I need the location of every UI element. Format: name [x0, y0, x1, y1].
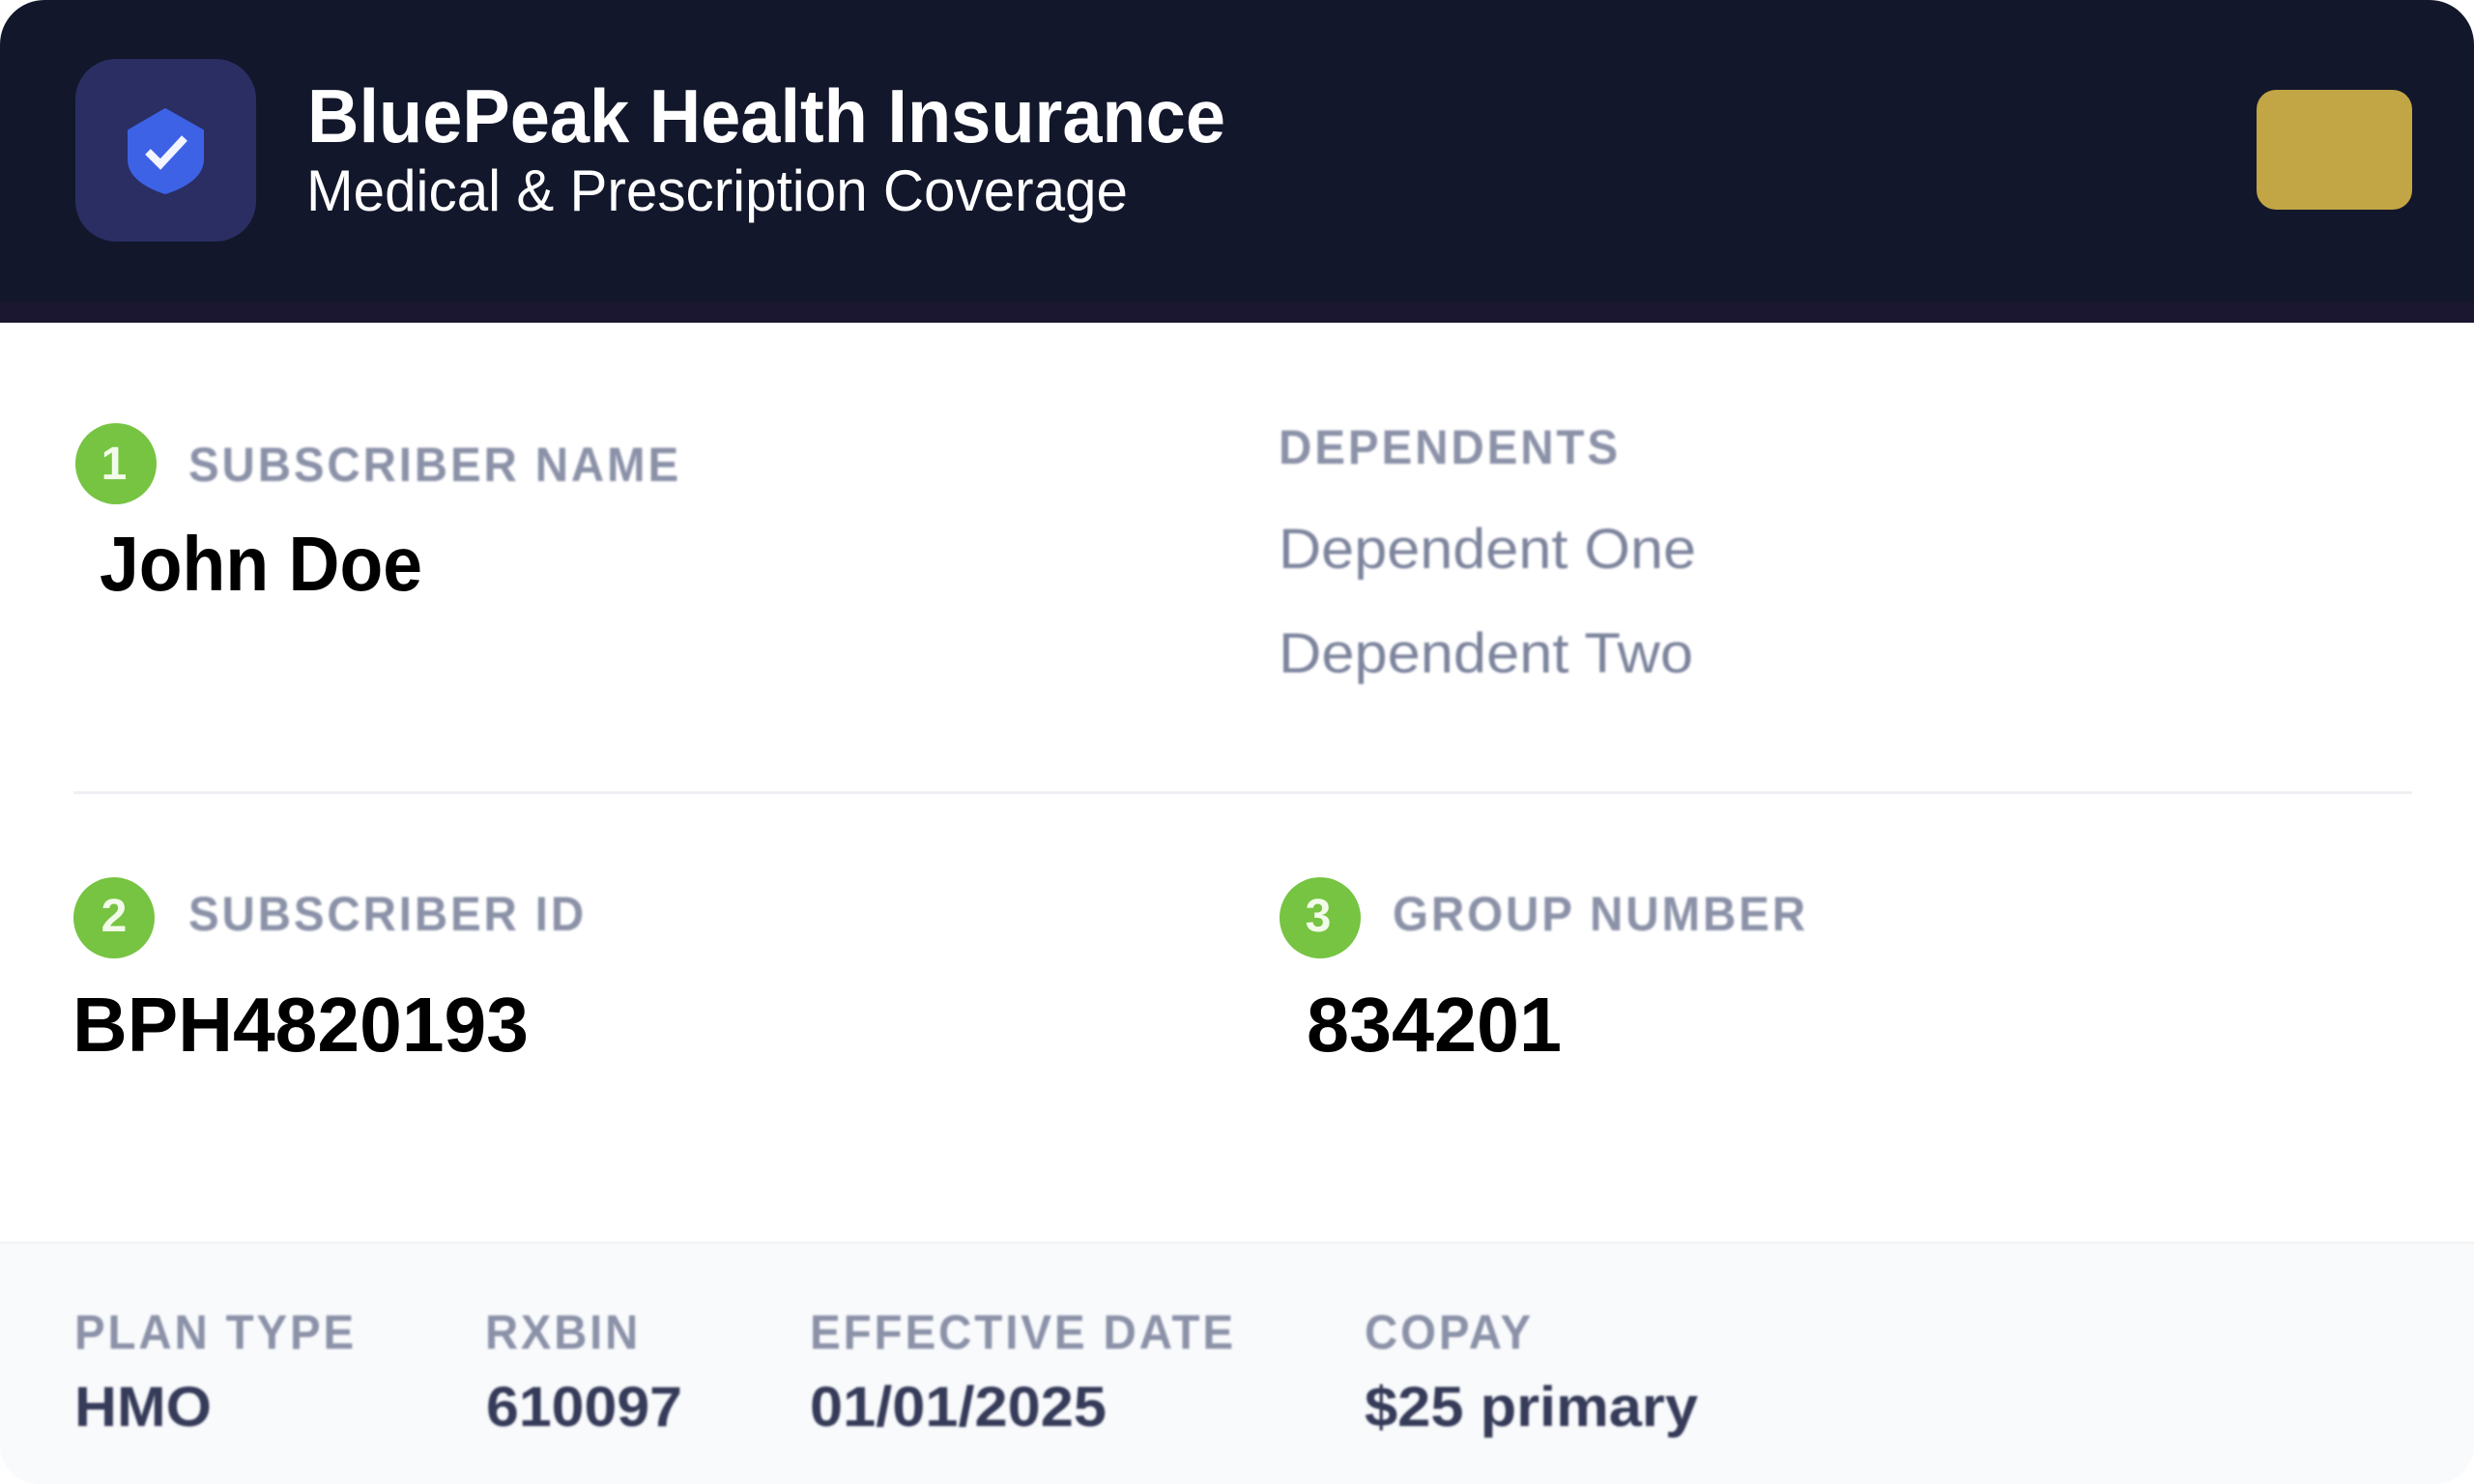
label: group number: GROUP NUMBER [1393, 887, 1808, 941]
copay [1365, 1305, 1698, 1439]
icon: shield logo [75, 59, 256, 242]
label: subscriber name: SUBSCRIBER NAME [188, 438, 681, 492]
plan type [74, 1305, 357, 1439]
icon: gold chip [2257, 90, 2412, 210]
value: group number: 834201 [1307, 982, 1562, 1068]
dependent one: Dependent One [1279, 518, 1696, 581]
copay: COPAY [1365, 1305, 1534, 1359]
rxbin: RXBIN [485, 1305, 641, 1359]
panel: footer [0, 1241, 2474, 1484]
effective date [810, 1305, 1236, 1439]
value: subscriber id: BPH4820193 [72, 982, 529, 1068]
rxbin [485, 1305, 682, 1439]
effective date: 01/01/2025 [810, 1376, 1107, 1439]
plan type: HMO [74, 1376, 212, 1439]
copay: $25 primary [1365, 1376, 1698, 1439]
badge 2 [73, 877, 155, 958]
label: subscriber id: SUBSCRIBER ID [188, 887, 587, 941]
badge 2: 2 [101, 891, 127, 942]
section: subscriber name [75, 423, 681, 607]
badge 3 [1280, 877, 1361, 958]
dependent two: Dependent Two [1279, 622, 1693, 685]
badge 3: 3 [1306, 891, 1331, 942]
value: John Doe: John Doe [100, 521, 422, 607]
section: subscriber id [72, 877, 587, 1068]
badge 1: 1 [101, 439, 127, 490]
plan type: PLAN TYPE [74, 1305, 357, 1359]
label: dependents: DEPENDENTS [1279, 420, 1621, 474]
section: dependents [1279, 420, 1696, 685]
title: BluePeak Health Insurance [307, 73, 1225, 158]
panel: header band [0, 0, 2474, 323]
section: group number [1280, 877, 1808, 1068]
subtitle: Medical & Prescription Coverage [306, 158, 1128, 223]
badge 1 [75, 423, 157, 504]
rxbin: 610097 [486, 1376, 682, 1439]
effective date: EFFECTIVE DATE [810, 1305, 1236, 1359]
